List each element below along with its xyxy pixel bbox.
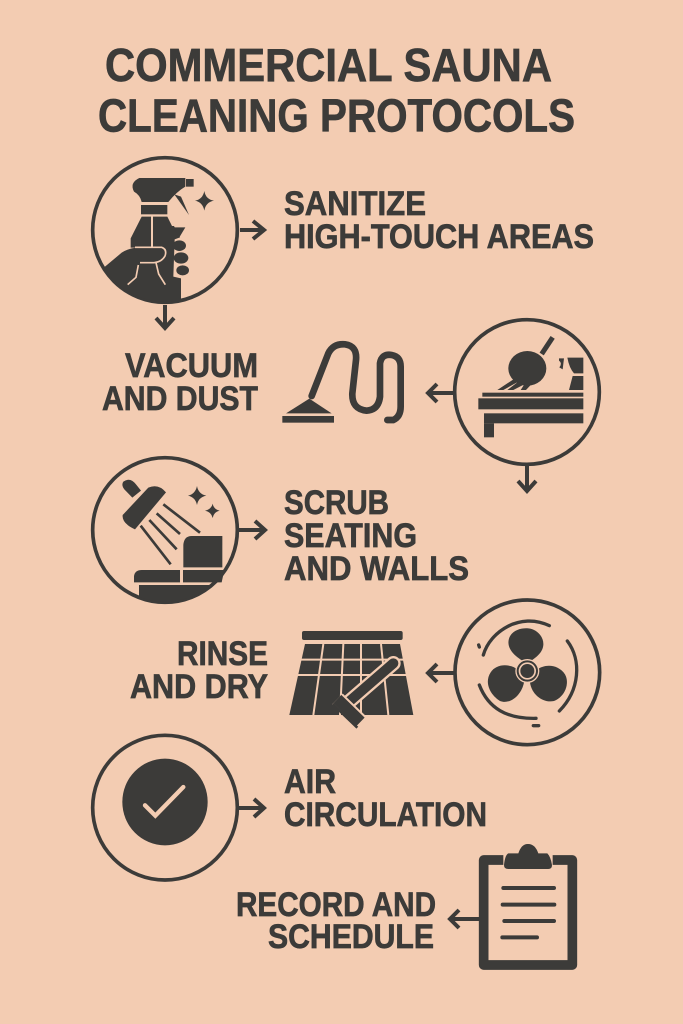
label: rinse and dry: AND DRY <box>130 668 268 706</box>
label: air circulation: AIR <box>284 763 336 801</box>
step 5: check mark circle icon <box>93 735 237 880</box>
icon: ventilation fan circle <box>455 600 600 745</box>
label: rinse and dry <box>130 635 268 706</box>
label: record and schedule: SCHEDULE <box>268 918 434 956</box>
label: record and schedule <box>236 886 436 956</box>
arrow: clipboard left <box>450 910 480 928</box>
label: sanitize high-touch areas: SANITIZE <box>284 185 426 223</box>
step 1: sanitize icon <box>93 158 237 307</box>
icon: vacuum cleaner <box>282 344 401 423</box>
label: vacuum and dust <box>102 347 258 418</box>
label: record and schedule: RECORD AND <box>236 886 436 924</box>
label: vacuum and dust: VACUUM <box>125 347 258 385</box>
icon: tiled floor with squeegee <box>289 631 413 728</box>
arrow: step 5 right <box>239 799 264 817</box>
title <box>98 39 575 142</box>
label: rinse and dry: RINSE <box>177 635 268 673</box>
arrow: step 1 down <box>156 305 174 328</box>
label: sanitize high-touch areas: HIGH-TOUCH AREAS <box>284 218 594 256</box>
arrow: bench step down <box>518 465 536 491</box>
arrow: floor step left <box>428 664 454 682</box>
label: sanitize high-touch areas <box>284 185 594 256</box>
label: scrub seating and walls <box>284 484 469 588</box>
arrow: step 3 right <box>239 521 265 539</box>
label: vacuum and dust: AND DUST <box>102 380 258 418</box>
arrow: step 1 right <box>240 221 264 239</box>
step 3: shower icon <box>93 458 237 607</box>
label: air circulation <box>284 763 487 834</box>
label: scrub seating and walls: SCRUB <box>284 484 389 522</box>
icon: bench dusting circle <box>455 320 599 464</box>
label: scrub seating and walls: SEATING <box>284 517 417 555</box>
title: COMMERCIAL SAUNA <box>105 39 552 91</box>
icon: clipboard <box>484 844 572 965</box>
arrow: vacuum step left <box>428 384 454 402</box>
label: air circulation: CIRCULATION <box>284 796 487 834</box>
title: CLEANING PROTOCOLS <box>98 90 575 142</box>
label: scrub seating and walls: AND WALLS <box>284 550 469 588</box>
